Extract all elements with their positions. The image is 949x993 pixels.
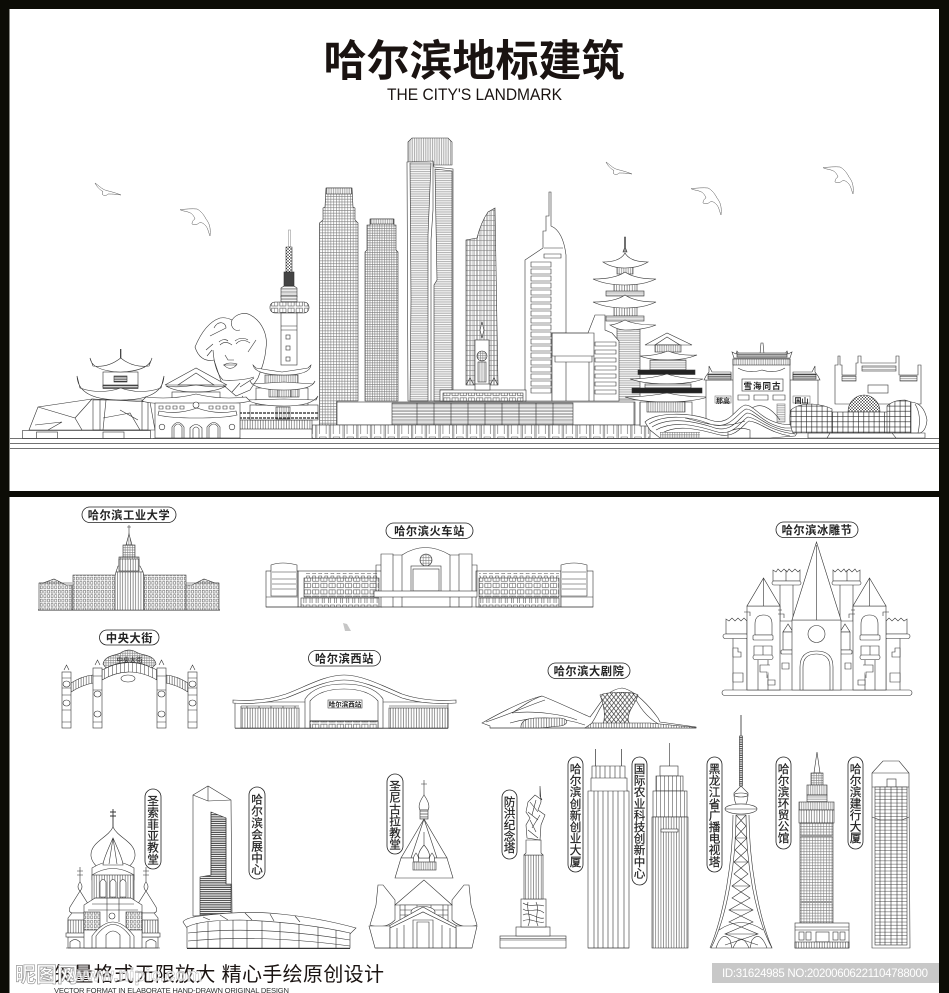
tower: pagoda [593, 237, 656, 400]
small turret [783, 624, 793, 632]
label: 国际农业科技创新中心: 国际农业科技创新中心 [634, 763, 646, 880]
landmark: Central Avenue arch [62, 650, 197, 728]
label: 哈尔滨环贸公馆 [776, 757, 791, 849]
landmark: Harbin West station: 哈尔滨西站 [329, 700, 362, 708]
building: memorial gateway: 雪海同古 [743, 381, 782, 391]
label: 哈尔滨工业大学 [82, 507, 176, 522]
label: 哈尔滨大剧院: 哈尔滨大剧院 [554, 664, 624, 678]
landmark: Saint Nicholas Church [369, 780, 477, 948]
tower: twin high-rise right [365, 219, 398, 401]
landmark: Ice sculpture castle [722, 542, 912, 696]
label: 哈尔滨建行大厦: 哈尔滨建行大厦 [850, 763, 862, 845]
side spire [77, 867, 83, 895]
subtitle: THE CITY'S LANDMARK [387, 86, 562, 104]
landmark: Harbin West station [233, 675, 456, 728]
outer tower [726, 618, 747, 690]
tower: clock tower [466, 322, 498, 390]
label: 哈尔滨会展中心: 哈尔滨会展中心 [251, 794, 263, 877]
label: 哈尔滨创新创业大厦: 哈尔滨创新创业大厦 [570, 763, 582, 869]
landmark: Flood Control Monument [500, 786, 566, 948]
label: 圣尼古拉教堂: 圣尼古拉教堂 [389, 780, 401, 852]
label: 哈尔滨火车站 [386, 523, 473, 538]
building: wave-shaped hall [645, 405, 802, 438]
landmark: Innovation and Entrepreneurship Tower [588, 749, 629, 948]
label: 黑龙江省广播电视塔: 黑龙江省广播电视塔 [709, 763, 721, 869]
label: 哈尔滨建行大厦 [848, 757, 863, 849]
podium: terrace with square windows [440, 390, 526, 401]
podium: long horizontal block [337, 402, 635, 425]
building: memorial gateway: 国山 [794, 396, 808, 405]
building: latticed domes [790, 395, 927, 438]
small stray mark [343, 623, 351, 631]
landmark: Harbin railway station [266, 548, 593, 607]
label: 哈尔滨冰雕节 [776, 522, 858, 538]
landmark: Harbin Huanmao Mansion [795, 752, 849, 948]
landmark: Harbin Convention and Exhibition Center [183, 786, 356, 948]
building: traditional temple [625, 333, 708, 426]
label: 防洪纪念塔 [502, 790, 517, 859]
tower: tallest glass tower [407, 138, 453, 401]
panel: skyline of landmarks [10, 138, 939, 448]
building: two-tier pavilion [77, 349, 164, 430]
label: 哈尔滨西站: 哈尔滨西站 [315, 652, 374, 666]
building: archway behind grid domes [835, 356, 921, 404]
label: 中央大街: 中央大街 [106, 631, 153, 645]
label: 哈尔滨大剧院 [548, 663, 630, 678]
label: 圣索菲亚教堂 [145, 789, 161, 869]
side tower body [747, 606, 780, 690]
watermark: image id bar [712, 963, 939, 983]
label: 哈尔滨火车站: 哈尔滨火车站 [394, 524, 465, 538]
watermark: image id bar: ID:31624985 NO:20200606221104788000 [722, 968, 928, 980]
label: 哈尔滨西站 [308, 650, 380, 666]
title: 哈尔滨地标建筑 [324, 38, 624, 86]
tower: antenna white tower [525, 192, 566, 401]
label: 防洪纪念塔: 防洪纪念塔 [504, 795, 516, 855]
watermark: site name [15, 964, 202, 987]
label: 哈尔滨工业大学: 哈尔滨工业大学 [88, 508, 170, 522]
landmark: Central Avenue arch: 中央大街 [116, 655, 143, 664]
landmark: Saint Sophia Cathedral [66, 809, 160, 948]
tower: curved grid tower [466, 208, 498, 385]
building: old hall with arched doors [142, 368, 250, 438]
tower: TV tower with pagoda base [239, 230, 318, 429]
podium: arcade colonnade [312, 425, 650, 438]
building: rock-shaped grand hall [22, 399, 155, 438]
label: 中央大街 [100, 630, 159, 645]
label: 哈尔滨环贸公馆: 哈尔滨环贸公馆 [778, 763, 790, 845]
landmark: Harbin Institute of Technology [38, 525, 220, 610]
label: 圣索菲亚教堂: 圣索菲亚教堂 [147, 795, 159, 866]
landmark: Agricultural Science Innovation Center [652, 743, 688, 948]
label: 圣尼古拉教堂 [387, 774, 403, 854]
back tower [773, 569, 800, 621]
watermark: site name: 昵图网 [15, 964, 78, 987]
label: 哈尔滨冰雕节: 哈尔滨冰雕节 [782, 523, 852, 537]
footer slogan: 矢量格式无限放大 精心手绘原创设计 [53, 963, 384, 986]
landmark: Heilongjiang broadcasting TV tower [710, 715, 772, 948]
ground lines [10, 438, 939, 448]
label: 哈尔滨会展中心 [249, 787, 265, 879]
landmark: Harbin CCB tower [872, 761, 910, 948]
watermark: site name: www.nipic.com [71, 965, 202, 985]
building: memorial gateway [704, 343, 820, 425]
icon: seagulls [95, 162, 853, 236]
building: memorial gateway: 那高 [716, 396, 730, 405]
building: office block and podium [552, 315, 619, 401]
landmark: Harbin Grand Theatre [482, 688, 696, 728]
tower: twin high-rise left [320, 188, 358, 425]
panel: individual landmarks [38, 525, 912, 948]
sculpture: face statue [195, 313, 266, 396]
